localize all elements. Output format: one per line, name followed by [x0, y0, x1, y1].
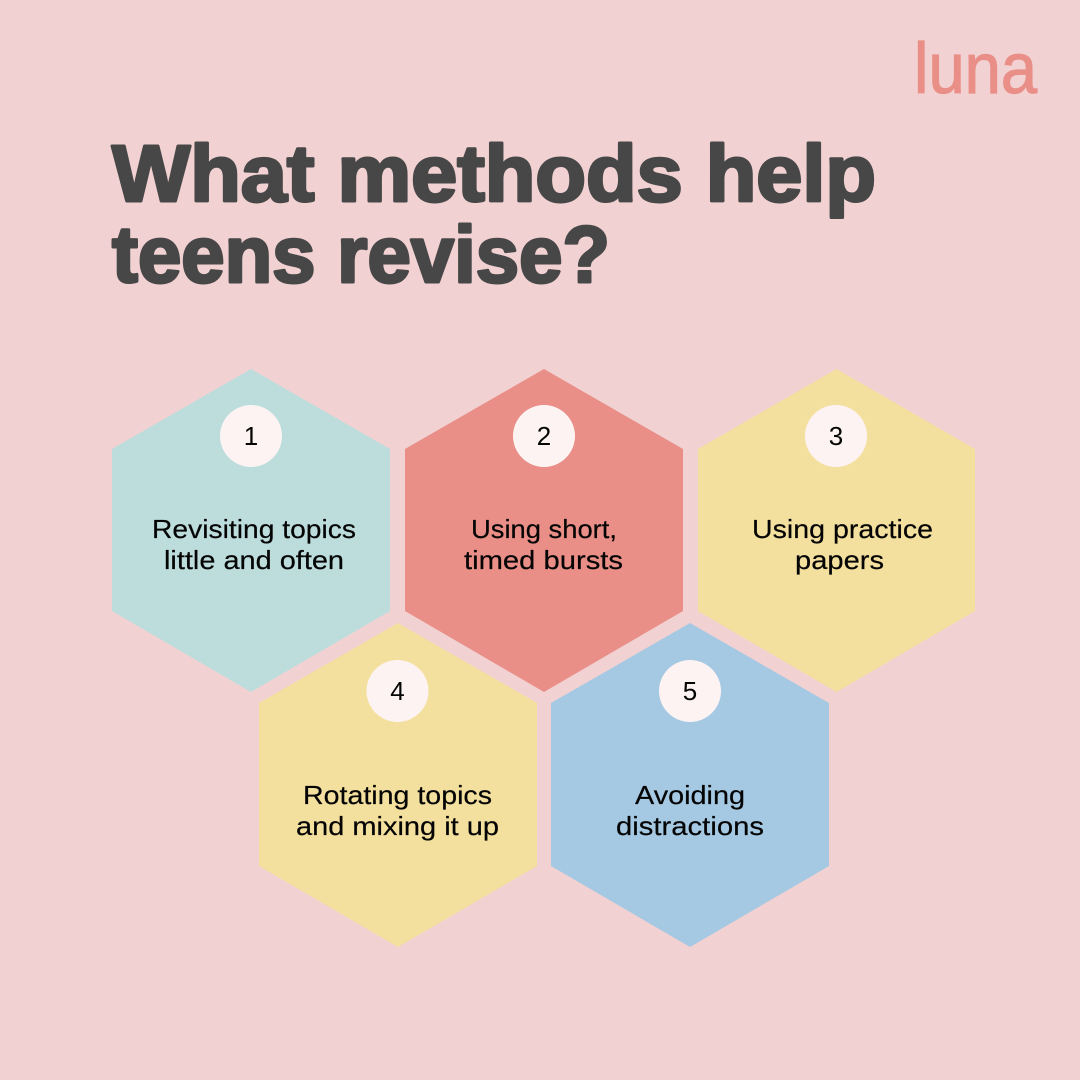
label 4: Rotating topics [303, 780, 492, 810]
panel: hexagon 4 [259, 623, 537, 947]
label 5: Avoiding [635, 780, 745, 810]
label 2: timed bursts [464, 545, 623, 575]
number badge 3: 3 [829, 421, 843, 451]
panel: hexagon 3 [698, 369, 975, 692]
number badge 1: 1 [244, 421, 258, 451]
label 1 [152, 514, 356, 575]
label 2 [464, 514, 623, 575]
label 1: little and often [164, 545, 344, 575]
number badge 1 [220, 405, 282, 467]
number badge 4 [366, 660, 428, 722]
number badge 2 [513, 405, 575, 467]
label 4 [296, 780, 499, 841]
panel: hexagon 5 [551, 623, 829, 947]
panel: hexagon 1 [112, 369, 390, 692]
title [112, 129, 876, 299]
label 3: Using practice [752, 514, 933, 544]
label 4: and mixing it up [296, 811, 499, 841]
number badge 2: 2 [537, 421, 551, 451]
number badge 5 [659, 660, 721, 722]
logo: luna: luna [914, 30, 1037, 109]
label 5: distractions [616, 811, 764, 841]
label 3: papers [795, 545, 884, 575]
label 1: Revisiting topics [152, 514, 356, 544]
panel: hexagon 2 [405, 369, 683, 692]
title: What methods help [112, 129, 876, 218]
number badge 3 [805, 405, 867, 467]
label 3 [752, 514, 933, 575]
label 5 [616, 780, 764, 841]
title: teens revise? [112, 210, 610, 299]
number badge 4: 4 [390, 676, 405, 706]
number badge 5: 5 [683, 676, 697, 706]
label 2: Using short, [471, 514, 617, 544]
